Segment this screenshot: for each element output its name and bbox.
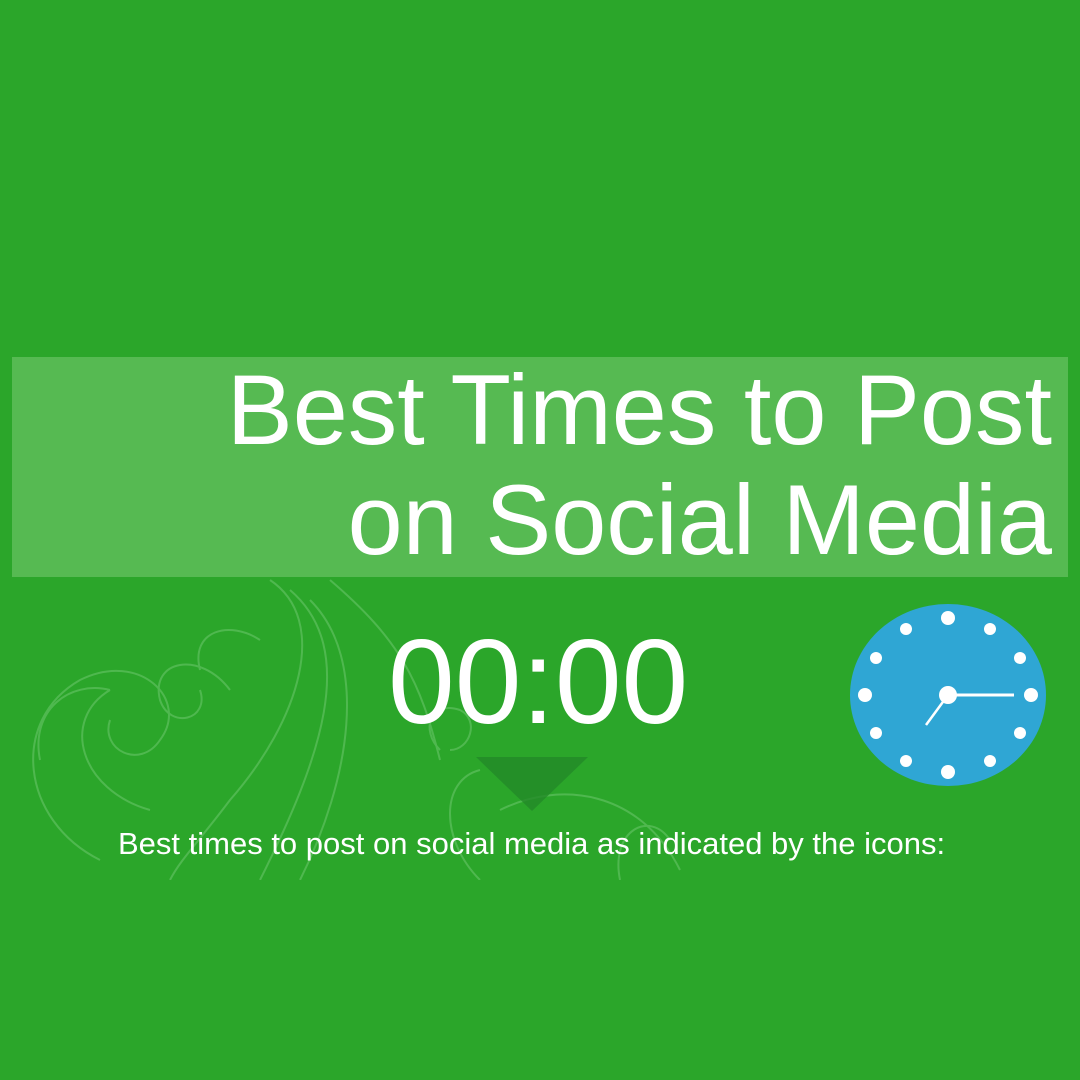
title banner <box>12 357 1068 577</box>
decorative swirls <box>32 579 681 880</box>
title: on Social Media <box>348 464 1052 575</box>
icon: clock <box>850 604 1046 786</box>
subtitle text: Best times to post on social media as indicated by the icons: <box>118 826 945 861</box>
title <box>227 354 1052 575</box>
title: Best Times to Post <box>227 354 1052 465</box>
icon: down arrow <box>476 757 588 811</box>
time display: 00:00 <box>388 615 688 749</box>
